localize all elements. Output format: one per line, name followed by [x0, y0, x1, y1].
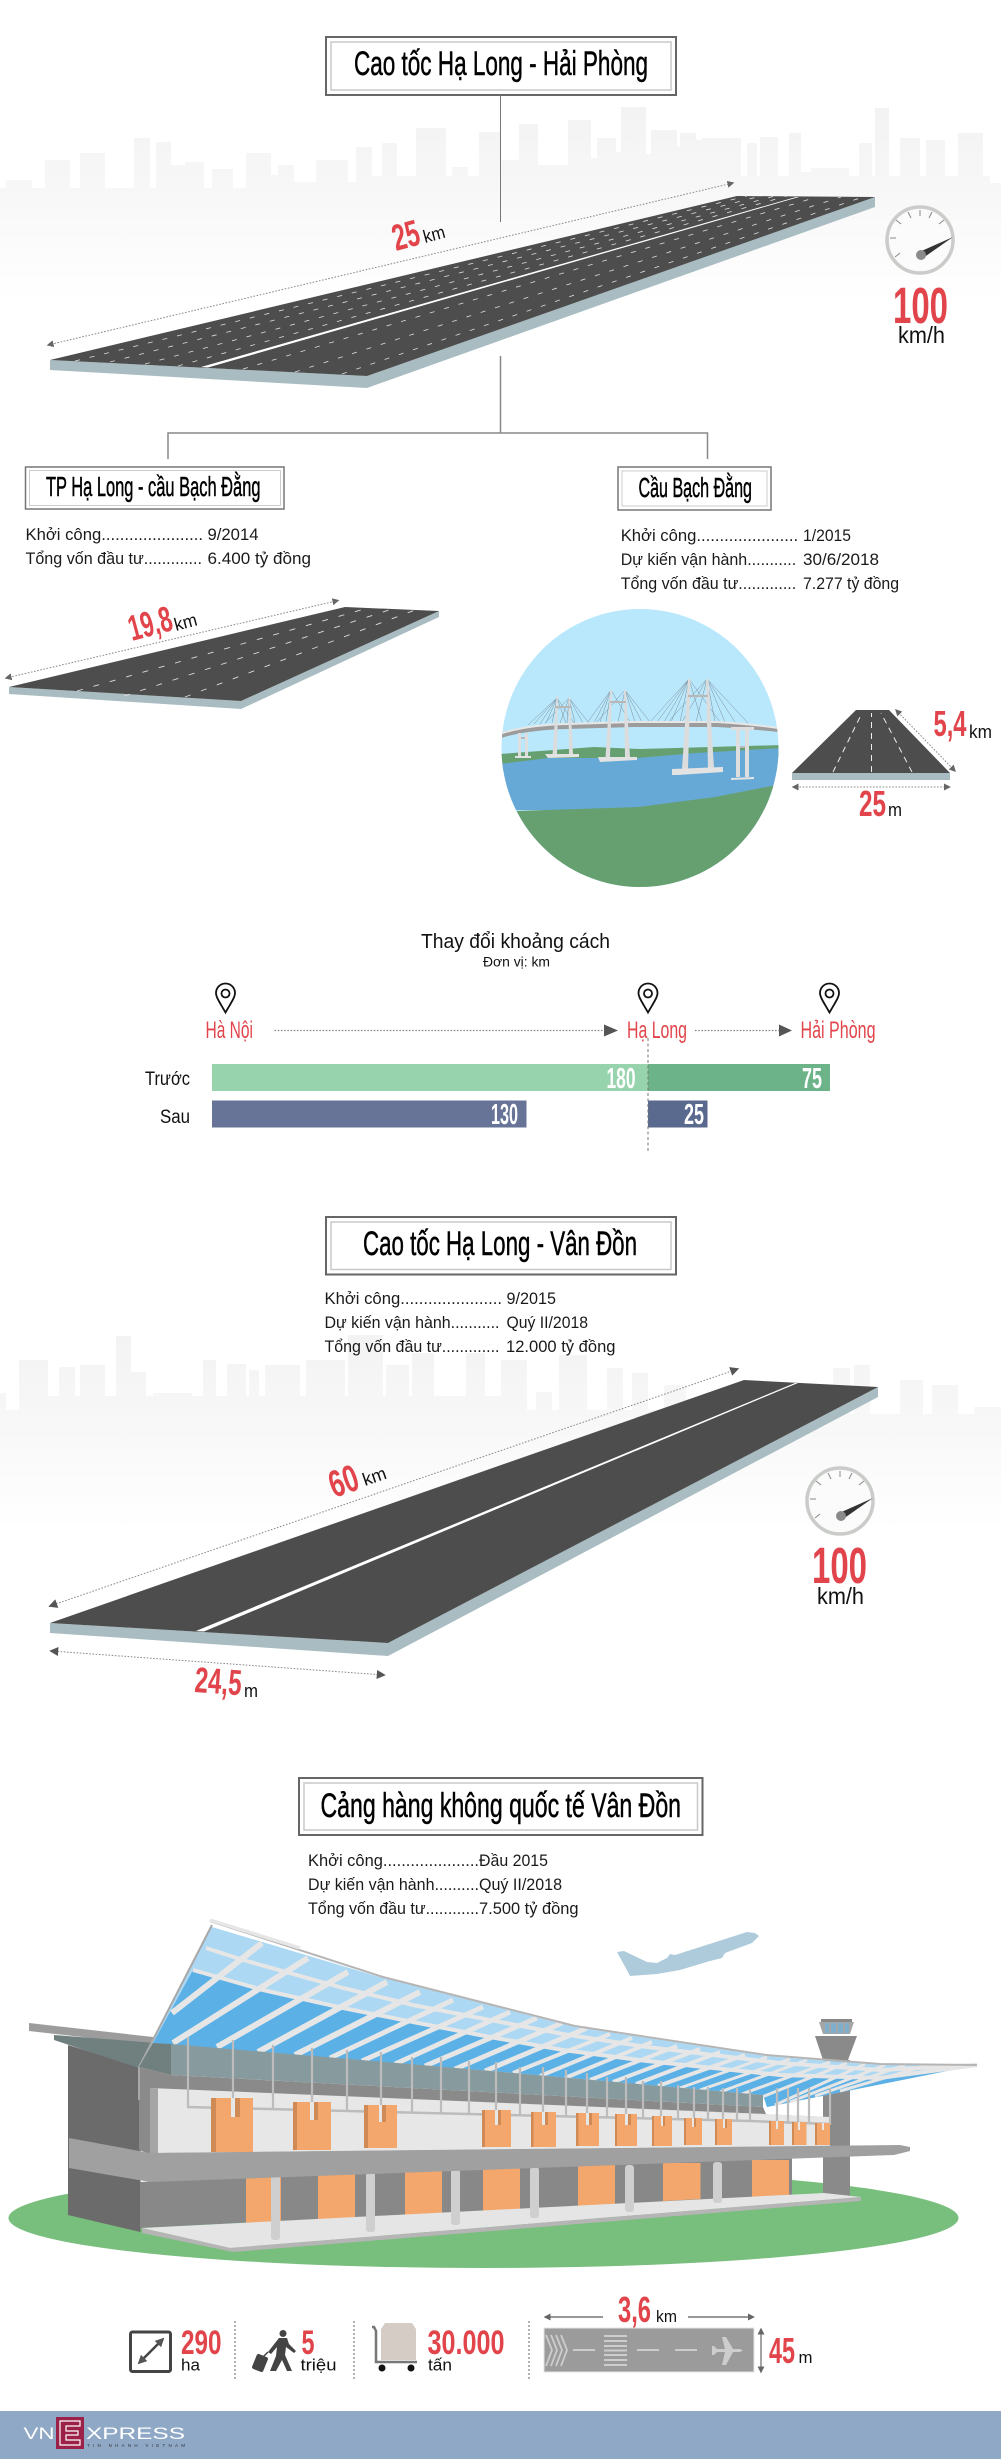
icon: speedometer: [807, 1468, 873, 1534]
heading: TP Ha Long - cau Bach Dang: TP Hạ Long - cầu Bạch Đằng: [46, 471, 260, 502]
connector: road to two sections: [168, 356, 708, 459]
logo: VnExpress: XPRESS: [86, 2424, 185, 2443]
title: Cao toc Ha Long - Hai Phong: [326, 37, 676, 95]
roof longitudinal beams: [206, 1948, 977, 2070]
stat: 290 ha: 290: [181, 2324, 222, 2362]
road: main expressway 25 km: [50, 196, 875, 388]
label: 19,8 km: km: [172, 610, 199, 635]
label: 60 km: 60: [323, 1457, 364, 1507]
info: TP Ha Long - cau Bach Dang: 6.400 tỷ đồng: [208, 549, 311, 568]
stat: 290 ha: ha: [181, 2356, 201, 2374]
label: 25 km: 25: [387, 212, 424, 259]
heading: distance change: Thay đổi khoảng cách: [421, 931, 610, 953]
row label: after: Sau: [160, 1107, 190, 1128]
title: Cang hang khong quoc te Van Don: Cảng hàng không quốc tế Vân Đồn: [320, 1787, 681, 1825]
upper wall: [150, 2088, 830, 2154]
icon: pin Ha Long: [638, 984, 658, 1012]
footer bar: [0, 2411, 1001, 2459]
divider: [353, 2321, 355, 2379]
info: airport: 7.500 tỷ đồng: [479, 1899, 578, 1918]
bar chart: distance before and after: [145, 1063, 830, 1131]
illustration: cable-stayed bridge in circle: [500, 608, 782, 890]
label: 25 m: 25: [859, 783, 886, 824]
bridge pylons: [552, 679, 714, 769]
dimension arrow: 5.4 km: [896, 710, 955, 771]
speed: 100 km/h: km/h: [898, 322, 945, 348]
value: 130: 130: [491, 1099, 518, 1131]
heading: distance change: [421, 931, 610, 970]
columns: [271, 2162, 722, 2240]
heading: distance change: Đơn vị: km: [483, 954, 550, 970]
info: airport: Quý II/2018: [479, 1875, 562, 1894]
info: TP Ha Long - cau Bach Dang: Tổng vốn đầu tư.............: [26, 549, 202, 568]
connector: title to road: [500, 95, 502, 222]
stat: 5 trieu: 5: [302, 2324, 314, 2362]
dark band: [139, 2067, 766, 2114]
info: TP Ha Long - cau Bach Dang: Khởi công......................: [26, 525, 203, 544]
heading: Cau Bach Dang: [618, 467, 771, 510]
label: 3,6 km: km: [656, 2307, 677, 2326]
label: 24,5 m: m: [244, 1681, 258, 1701]
heading: Cau Bach Dang: Cầu Bạch Đằng: [638, 472, 752, 503]
speed: 100 km/h: 100: [812, 1537, 867, 1594]
info: TP Ha Long - cau Bach Dang: 9/2014: [208, 525, 258, 544]
arrow: Ha Noi to Ha Long: [274, 1024, 618, 1036]
label: 25 km: km: [421, 222, 447, 247]
illustration: airport terminal: [8, 1920, 977, 2268]
info: Cau Bach Dang: 7.277 tỷ đồng: [803, 574, 899, 593]
title: Cao toc Ha Long - Van Don: Cao tốc Hạ Long - Vân Đồn: [363, 1225, 637, 1263]
fascia: [171, 2044, 763, 2107]
speed: 100 km/h: [893, 277, 948, 348]
hanging rods and gutter: [188, 2037, 830, 2125]
speed: 100 km/h: [812, 1537, 867, 1609]
info: airport: Đầu 2015: [479, 1851, 548, 1870]
info: Ha Long - Van Don: Dự kiến vận hành...........: [324, 1313, 500, 1332]
city labels: Hà Nội: [206, 1017, 253, 1044]
bridge deck: [501, 722, 778, 738]
lower wall: [140, 2158, 792, 2228]
icon: passenger with suitcase: [251, 2330, 296, 2373]
dimension arrow: runway width: [760, 2329, 762, 2372]
roof transverse beams: [172, 1943, 420, 2055]
logo: VnExpress: [24, 2417, 185, 2449]
label: 25 m: m: [888, 800, 902, 820]
bar: after Ha Noi - Ha Long: [212, 1100, 526, 1128]
left roof: [29, 2023, 153, 2045]
stat: 30.000 tan: [428, 2324, 504, 2374]
icon: runway: [544, 2328, 754, 2372]
lower orange panels: [246, 2160, 789, 2224]
bar: before Ha Long - Hai Phong: [648, 1064, 830, 1091]
info: Ha Long - Van Don: Khởi công......................: [324, 1289, 502, 1308]
divider: [234, 2321, 236, 2379]
title: Cao toc Ha Long - Van Don: [326, 1217, 676, 1274]
dimension arrow: runway length left: [545, 2316, 603, 2318]
value: 25: 25: [684, 1099, 704, 1131]
info: airport: Khởi công.....................: [308, 1851, 479, 1870]
speed: 100 km/h: km/h: [817, 1583, 864, 1609]
divider: [528, 2321, 530, 2379]
icon: area arrow: [130, 2332, 170, 2372]
info: Cau Bach Dang: 1/2015: [803, 526, 851, 545]
info: Cau Bach Dang: [621, 526, 899, 593]
logo: VnExpress: TIN NHANH VIETNAM: [87, 2443, 185, 2448]
icon: pin Ha Noi: [216, 984, 235, 1012]
glass roof: [139, 1920, 977, 2107]
stat: 5 trieu: [300, 2324, 336, 2374]
info: Ha Long - Van Don: Quý II/2018: [506, 1313, 588, 1332]
icon: pin Hai Phong: [820, 984, 839, 1012]
grass: [8, 2168, 958, 2268]
icon: speedometer: [887, 207, 953, 273]
city labels: [206, 1017, 876, 1044]
stat: 290 ha: [181, 2324, 222, 2374]
roof edges: [210, 1921, 977, 2065]
title: Cang hang khong quoc te Van Don: [299, 1778, 702, 1835]
dimension arrow: 24.5 m: [51, 1651, 384, 1675]
label: 45 m: m: [798, 2348, 812, 2367]
city labels: Hải Phòng: [800, 1017, 876, 1044]
city labels: Hạ Long: [627, 1017, 687, 1044]
value: 180: 180: [606, 1063, 636, 1095]
bar: before Ha Noi - Ha Long: [212, 1064, 648, 1091]
info: airport: Dự kiến vận hành..........: [308, 1875, 479, 1894]
background skyline: Ha Long - Hai Phong: [0, 107, 1001, 300]
info: airport: [308, 1851, 578, 1918]
dimension arrow: 60 km: [50, 1369, 738, 1606]
label: 5,4 km: km: [969, 722, 992, 742]
road: Ha Long section 19.8 km: [9, 607, 439, 709]
logo: VnExpress: VN: [24, 2424, 54, 2443]
icon: cargo cart: [372, 2323, 417, 2372]
info: Ha Long - Van Don: [324, 1289, 616, 1356]
dimension arrow: 25 m: [793, 786, 950, 788]
road: front view with 25 m width and 5.4 km length: [792, 710, 950, 780]
dimension arrow: road length: [48, 183, 733, 345]
stat: 30.000 tan: tấn: [428, 2356, 452, 2374]
illustration: airplane: [617, 1932, 759, 1976]
arrow: Ha Long to Hai Phong: [695, 1024, 792, 1036]
floor: [142, 2193, 861, 2248]
upper orange panels: [211, 2098, 830, 2152]
label: 45 m: 45: [769, 2330, 795, 2371]
label: 3,6 km: 3,6: [618, 2289, 651, 2330]
heading: TP Ha Long - cau Bach Dang: [26, 467, 284, 509]
dimension arrow: 19.8 km: [6, 600, 338, 678]
bar: after Ha Long - Hai Phong: [648, 1100, 708, 1128]
stat: 30.000 tan: 30.000: [428, 2324, 504, 2362]
walkway beam: [69, 2138, 910, 2182]
dimension arrow: runway length right: [688, 2316, 754, 2318]
label: 24,5 m: 24,5: [193, 1659, 243, 1703]
stat: 5 trieu: triệu: [300, 2356, 336, 2374]
background skyline: Ha Long - Van Don: [0, 1335, 1001, 1530]
info: Cau Bach Dang: Dự kiến vận hành...........: [621, 550, 796, 569]
title: Cao toc Ha Long - Hai Phong: Cao tốc Hạ Long - Hải Phòng: [354, 45, 648, 83]
info: airport: Tổng vốn đầu tư............: [308, 1899, 479, 1918]
road: Ha Long - Van Don 60 km: [50, 1380, 878, 1656]
bridge cables: [528, 679, 748, 725]
control tower: [815, 2019, 857, 2196]
label: 5,4 km: 5,4: [934, 703, 966, 744]
row label: before: Trước: [145, 1069, 190, 1090]
label: 60 km: km: [360, 1463, 389, 1490]
info: Cau Bach Dang: Khởi công......................: [621, 526, 798, 545]
info: Cau Bach Dang: 30/6/2018: [803, 550, 879, 569]
value: 75: 75: [802, 1063, 822, 1095]
left wing wall: [68, 2045, 140, 2232]
info: Cau Bach Dang: Tổng vốn đầu tư.............: [621, 574, 796, 593]
divider: Ha Long marker: [647, 1038, 649, 1152]
info: Ha Long - Van Don: Tổng vốn đầu tư.............: [324, 1337, 500, 1356]
info: Ha Long - Van Don: 9/2015: [506, 1289, 556, 1308]
label: 19,8 km: 19,8: [123, 598, 177, 649]
speed: 100 km/h: 100: [893, 277, 948, 334]
info: TP Ha Long - cau Bach Dang: [26, 525, 311, 568]
info: Ha Long - Van Don: 12.000 tỷ đồng: [506, 1337, 616, 1356]
